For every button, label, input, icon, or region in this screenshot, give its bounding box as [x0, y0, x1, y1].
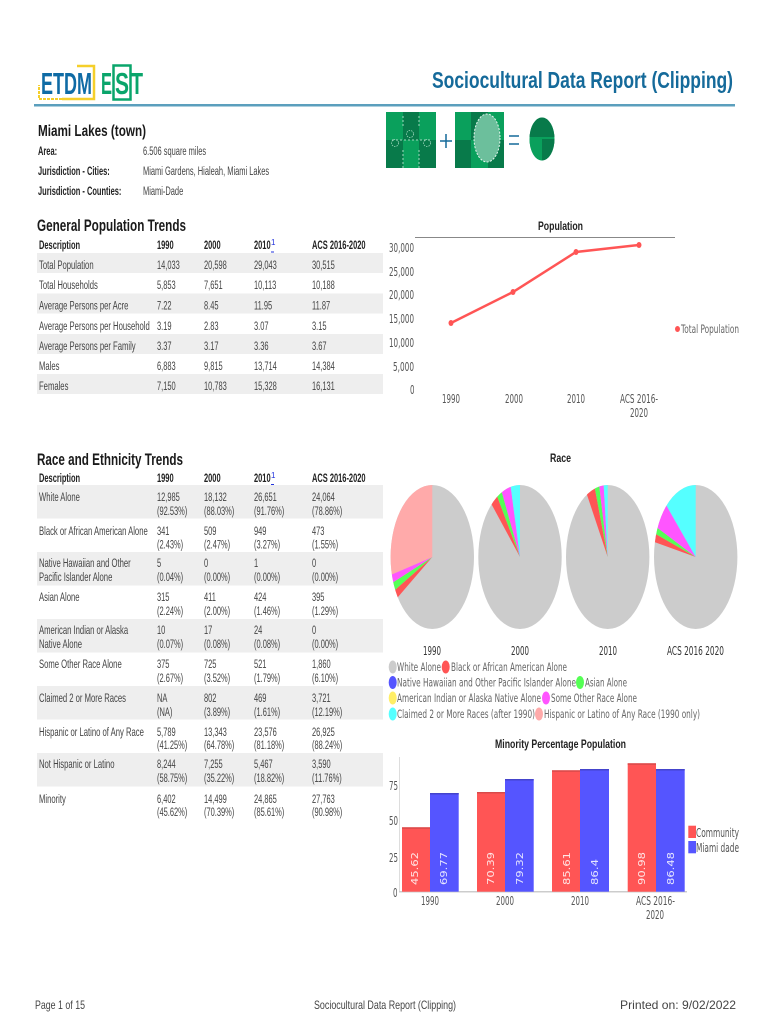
row: Hispanic or Latino of Any Race: (41.25%) — [157, 739, 187, 753]
row: Minority: 24,865 — [254, 793, 277, 807]
row: Not Hispanic or Latino: 7,255 — [204, 758, 223, 772]
row: Some Other Race Alone: 725 — [204, 658, 217, 672]
row: Native Hawaiian and Other Pacific Islander Alone: 0 — [204, 557, 208, 571]
row: Claimed 2 or More Races: 3,721 — [312, 692, 331, 706]
y axis labels: 15,000 — [389, 312, 414, 326]
table header: 1 — [271, 238, 276, 247]
bars: 2010: 85.61 — [562, 852, 573, 885]
row: Asian Alone: 395 — [312, 591, 325, 605]
row: Some Other Race Alone: (2.67%) — [157, 672, 183, 686]
bars: 2010 — [552, 769, 609, 892]
row: White Alone — [37, 485, 383, 519]
community facts: Jurisdiction - Cities: — [38, 165, 110, 179]
table header: 1990 — [157, 239, 174, 253]
row: American Indian or Alaska Native Alone: American Indian or Alaska — [39, 624, 128, 638]
bars: 2010: 86.4 — [590, 859, 601, 885]
community facts: Area: — [38, 145, 57, 159]
chart: minority percentage bar chart — [389, 737, 739, 922]
logo: ETDM EST: ETDM — [41, 66, 92, 101]
legend: race categories — [389, 660, 700, 721]
row: Claimed 2 or More Races — [37, 686, 383, 720]
row: Hispanic or Latino of Any Race: 23,576 — [254, 726, 277, 740]
row: Total Population: 30,515 — [312, 259, 335, 273]
row: Black or African American Alone: 473 — [312, 525, 325, 539]
row: American Indian or Alaska Native Alone: (0.00%) — [312, 638, 338, 652]
logo: ETDM EST: E — [101, 66, 112, 101]
row: Minority — [39, 793, 342, 820]
x axis labels: 2010 — [567, 392, 585, 406]
row: Minority: (90.98%) — [312, 806, 342, 820]
row: Not Hispanic or Latino — [37, 753, 383, 786]
pie: ACS 2016-2020 — [654, 485, 738, 629]
table: general population trends — [37, 238, 383, 394]
row: Minority: Minority — [39, 793, 67, 807]
row: American Indian or Alaska Native Alone: Native Alone — [39, 638, 82, 652]
bars: 1990 — [402, 793, 459, 892]
row: Native Hawaiian and Other Pacific Islander Alone: (0.04%) — [157, 571, 183, 585]
footer — [35, 998, 736, 1012]
row: Asian Alone: 411 — [204, 591, 216, 605]
community facts: Miami Gardens, Hialeah, Miami Lakes — [143, 165, 269, 179]
legend: total population — [675, 322, 739, 336]
y axis labels: 75 — [389, 779, 398, 793]
row: Females: 10,783 — [204, 380, 227, 394]
row: Hispanic or Latino of Any Race: (64.78%) — [204, 739, 234, 753]
y axis labels — [389, 241, 414, 397]
row: Average Persons per Acre: 7.22 — [157, 300, 172, 313]
row: Males: Males — [39, 360, 59, 374]
table header: 1990 — [157, 472, 174, 486]
y axis labels: 0 — [410, 383, 414, 397]
row: Some Other Race Alone: (6.10%) — [312, 672, 338, 686]
row: Claimed 2 or More Races: 802 — [204, 692, 217, 706]
x axis labels: 2020 — [630, 406, 648, 420]
pie year labels — [423, 644, 724, 658]
row: Claimed 2 or More Races: (3.89%) — [204, 706, 230, 720]
row: Average Persons per Acre: 11.87 — [312, 300, 330, 313]
row: Average Persons per Household — [39, 320, 327, 334]
table header: 1 — [271, 471, 276, 480]
row: Black or African American Alone: 949 — [254, 525, 267, 539]
x axis labels: ACS 2016- — [636, 894, 675, 908]
bars: 2000: 79.32 — [515, 852, 526, 885]
footer: Sociocultural Data Report (Clipping) — [314, 998, 456, 1012]
footer: Printed on: 9/02/2022 — [620, 998, 736, 1012]
row: White Alone: White Alone — [39, 491, 80, 505]
pie: 2000 — [478, 485, 562, 629]
row: Native Hawaiian and Other Pacific Islander Alone: 5 — [157, 557, 161, 571]
y axis labels: 25,000 — [389, 265, 414, 279]
row: White Alone: 26,651 — [254, 491, 277, 505]
row: Native Hawaiian and Other Pacific Islander Alone: 0 — [312, 557, 316, 571]
row: Females: 7,150 — [157, 380, 176, 394]
x axis labels: 2000 — [505, 392, 523, 406]
row: White Alone: (92.53%) — [157, 505, 187, 519]
row: Males: 14,384 — [312, 360, 335, 374]
row: Total Population: Total Population — [39, 259, 94, 273]
row: Total Households — [39, 279, 335, 293]
pie year labels: 2010 — [599, 644, 617, 658]
x axis labels — [421, 894, 675, 922]
row: Total Households: 7,651 — [204, 279, 223, 293]
row: White Alone: (91.76%) — [254, 505, 284, 519]
row: Males — [39, 360, 335, 374]
legend: race categories: Native Hawaiian and Other Pacific Islander Alone — [397, 676, 576, 690]
row: Not Hispanic or Latino: (18.82%) — [254, 772, 284, 786]
row: Average Persons per Household: 2.83 — [204, 320, 219, 334]
row: Total Households: 10,188 — [312, 279, 335, 293]
row: Asian Alone: Asian Alone — [39, 591, 80, 605]
row: American Indian or Alaska Native Alone — [37, 619, 383, 652]
row: Claimed 2 or More Races: (NA) — [157, 706, 172, 720]
row: Total Households: 5,853 — [157, 279, 176, 293]
bars: ACS 2016-2020 — [628, 763, 685, 892]
table: race and ethnicity trends — [37, 471, 383, 820]
legend: race categories: Claimed 2 or More Races (after 1990) — [397, 707, 535, 721]
row: Claimed 2 or More Races: 469 — [254, 692, 267, 706]
row: Black or African American Alone: Black or African American Alone — [39, 525, 148, 539]
row: Total Population — [37, 253, 383, 273]
x axis labels: 1990 — [442, 392, 460, 406]
bars: 2000: 70.39 — [486, 852, 497, 885]
chart: population line chart — [389, 219, 739, 420]
row: Not Hispanic or Latino: (11.76%) — [312, 772, 342, 786]
chart title: Minority Percentage Population — [495, 737, 626, 751]
row: Some Other Race Alone: 375 — [157, 658, 170, 672]
bars: 1990: 69.77 — [439, 852, 450, 885]
row: Asian Alone: (1.29%) — [312, 605, 338, 619]
row: Average Persons per Acre: Average Persons per Acre — [39, 300, 129, 313]
row: Native Hawaiian and Other Pacific Islander Alone: Native Hawaiian and Other — [39, 557, 131, 571]
table header: 2010 — [254, 472, 271, 486]
line: total population — [448, 242, 642, 326]
row: Average Persons per Family: Average Persons per Family — [39, 340, 136, 354]
row: Males: 13,714 — [254, 360, 277, 374]
row: Total Households: 10,113 — [254, 279, 277, 293]
row: Minority: (45.62%) — [157, 806, 187, 820]
row: Average Persons per Household: Average Persons per Household — [39, 320, 150, 334]
row: Black or African American Alone: (3.27%) — [254, 539, 280, 552]
y axis labels — [389, 779, 398, 900]
bars: 2000 — [477, 779, 534, 892]
row: Minority: 27,763 — [312, 793, 335, 807]
table header: 2000 — [204, 239, 221, 253]
row: Black or African American Alone: (2.43%) — [157, 539, 183, 552]
row: Some Other Race Alone: (1.79%) — [254, 672, 280, 686]
row: Black or African American Alone: 341 — [157, 525, 170, 539]
y axis labels: 20,000 — [389, 288, 414, 302]
row: Average Persons per Family: 3.37 — [157, 340, 172, 354]
row: Total Population: 20,598 — [204, 259, 227, 273]
legend: race categories: Asian Alone — [585, 676, 627, 690]
icon: clipping puzzle equation — [386, 112, 555, 168]
row: American Indian or Alaska Native Alone: (0.07%) — [157, 638, 183, 652]
row: American Indian or Alaska Native Alone: (0.08%) — [204, 638, 230, 652]
logo: ETDM EST: S — [115, 66, 129, 101]
row: American Indian or Alaska Native Alone: (0.08%) — [254, 638, 280, 652]
row: Minority: (70.39%) — [204, 806, 234, 820]
row: American Indian or Alaska Native Alone: 10 — [157, 624, 166, 638]
row: Hispanic or Latino of Any Race: 5,789 — [157, 726, 176, 740]
table header — [39, 471, 366, 486]
row: Black or African American Alone — [39, 525, 338, 552]
row: Black or African American Alone: 509 — [204, 525, 217, 539]
row: Hispanic or Latino of Any Race: 13,343 — [204, 726, 227, 740]
y axis labels: 5,000 — [393, 360, 414, 374]
row: Average Persons per Household: 3.19 — [157, 320, 172, 334]
row: Females: 15,328 — [254, 380, 277, 394]
bars: ACS 2016-2020: 86.48 — [666, 852, 677, 885]
table header: 2000 — [204, 472, 221, 486]
row: White Alone: 12,985 — [157, 491, 180, 505]
row: Hispanic or Latino of Any Race: (88.24%) — [312, 739, 342, 753]
row: Hispanic or Latino of Any Race: Hispanic or Latino of Any Race — [39, 726, 144, 740]
row: Hispanic or Latino of Any Race: (81.18%) — [254, 739, 284, 753]
row: Average Persons per Household: 3.15 — [312, 320, 327, 334]
row: Some Other Race Alone — [39, 658, 338, 686]
row: Females: Females — [39, 380, 68, 394]
chart title: Population — [538, 219, 583, 233]
bars: 1990: 45.62 — [410, 852, 421, 885]
y axis labels: 30,000 — [389, 241, 414, 255]
row: Native Hawaiian and Other Pacific Islander Alone — [37, 552, 383, 586]
row: Females: 16,131 — [312, 380, 335, 394]
row: Native Hawaiian and Other Pacific Islander Alone: (0.00%) — [312, 571, 338, 585]
x axis labels: 2020 — [646, 908, 664, 922]
legend: race categories: White Alone — [397, 660, 441, 674]
row: Hispanic or Latino of Any Race: 26,925 — [312, 726, 335, 740]
pie: 2010 — [566, 485, 650, 629]
row: Total Households: Total Households — [39, 279, 98, 293]
community facts: 6.506 square miles — [143, 145, 206, 159]
table header: ACS 2016-2020 — [312, 239, 366, 253]
row: Total Population: 29,043 — [254, 259, 277, 273]
row: Asian Alone: (2.24%) — [157, 605, 183, 619]
table header: Description — [39, 239, 80, 253]
row: Not Hispanic or Latino: 5,467 — [254, 758, 273, 772]
x axis labels — [442, 392, 658, 420]
row: Average Persons per Family — [37, 334, 383, 354]
row: Average Persons per Family: 3.17 — [204, 340, 219, 354]
row: Average Persons per Acre: 8.45 — [204, 300, 219, 313]
x axis labels: 2010 — [571, 894, 589, 908]
x axis labels: ACS 2016- — [620, 392, 658, 406]
row: Not Hispanic or Latino: 3,590 — [312, 758, 331, 772]
row: Females — [37, 374, 383, 394]
row: American Indian or Alaska Native Alone: 24 — [254, 624, 263, 638]
y axis labels: 25 — [389, 851, 398, 865]
row: Asian Alone: (1.46%) — [254, 605, 280, 619]
y axis labels: 50 — [389, 814, 398, 828]
row: Average Persons per Family: 3.67 — [312, 340, 327, 354]
pie year labels: 1990 — [423, 644, 441, 658]
x axis labels: 2000 — [496, 894, 514, 908]
legend: community and Miami-Dade — [688, 826, 739, 855]
pie: 1990 — [390, 485, 474, 629]
row: Asian Alone: 424 — [254, 591, 267, 605]
row: White Alone: (88.03%) — [204, 505, 234, 519]
row: Native Hawaiian and Other Pacific Islander Alone: Pacific Islander Alone — [39, 571, 113, 585]
row: Minority: (85.61%) — [254, 806, 284, 820]
row: White Alone: (78.86%) — [312, 505, 342, 519]
legend: community and Miami-Dade: Miami dade — [696, 841, 739, 855]
community facts: Miami-Dade — [143, 185, 184, 199]
bars: ACS 2016-2020: 90.98 — [637, 852, 648, 885]
legend: race categories: American Indian or Alaska Native Alone — [397, 691, 541, 705]
row: Claimed 2 or More Races: (12.19%) — [312, 706, 342, 720]
row: Total Population: 14,033 — [157, 259, 180, 273]
row: Native Hawaiian and Other Pacific Islander Alone: (0.00%) — [204, 571, 230, 585]
row: Males: 9,815 — [204, 360, 223, 374]
row: Asian Alone: (2.00%) — [204, 605, 230, 619]
row: Average Persons per Acre — [37, 294, 383, 314]
logo: ETDM EST: T — [131, 66, 143, 101]
row: Not Hispanic or Latino: (58.75%) — [157, 772, 187, 786]
heading: General Population Trends: General Population Trends — [37, 217, 186, 235]
legend: total population: Total Population — [680, 322, 739, 336]
row: Some Other Race Alone: (3.52%) — [204, 672, 230, 686]
row: White Alone: 24,064 — [312, 491, 335, 505]
row: American Indian or Alaska Native Alone: 17 — [204, 624, 213, 638]
legend: community and Miami-Dade: Community — [696, 826, 739, 840]
row: Some Other Race Alone: 521 — [254, 658, 267, 672]
row: Some Other Race Alone: Some Other Race Alone — [39, 658, 122, 672]
y axis labels: 0 — [393, 886, 398, 900]
row: Not Hispanic or Latino: Not Hispanic or Latino — [39, 758, 115, 772]
row: Minority: 14,499 — [204, 793, 227, 807]
community name: Miami Lakes (town) — [38, 123, 146, 140]
community facts: Jurisdiction - Counties: — [38, 185, 121, 199]
chart: race pie charts — [388, 454, 738, 720]
legend: race categories: Black or African American Alone — [451, 660, 567, 674]
community facts — [38, 145, 269, 199]
row: Asian Alone: 315 — [157, 591, 170, 605]
table header — [39, 238, 366, 253]
table header: 2010 — [254, 239, 271, 253]
footer: Page 1 of 15 — [35, 998, 85, 1012]
row: Average Persons per Household: 3.07 — [254, 320, 269, 334]
row: Not Hispanic or Latino: 8,244 — [157, 758, 176, 772]
heading: Race and Ethnicity Trends: Race and Ethnicity Trends — [37, 451, 183, 469]
legend: race categories: Some Other Race Alone — [551, 691, 637, 705]
row: Claimed 2 or More Races: (1.61%) — [254, 706, 280, 720]
table header: Description — [39, 472, 80, 486]
row: Claimed 2 or More Races: NA — [157, 692, 168, 706]
row: Asian Alone — [39, 591, 338, 619]
row: Average Persons per Acre: 11.95 — [254, 300, 272, 313]
row: Not Hispanic or Latino: (35.22%) — [204, 772, 234, 786]
table header: ACS 2016-2020 — [312, 472, 366, 486]
x axis labels: 1990 — [421, 894, 439, 908]
row: Claimed 2 or More Races: Claimed 2 or More Races — [39, 692, 126, 706]
row: American Indian or Alaska Native Alone: 0 — [312, 624, 316, 638]
row: Hispanic or Latino of Any Race — [39, 726, 342, 753]
row: Average Persons per Family: 3.36 — [254, 340, 269, 354]
pie year labels: 2000 — [511, 644, 529, 658]
row: Black or African American Alone: (1.55%) — [312, 539, 338, 552]
pie year labels: ACS 2016 2020 — [667, 644, 724, 658]
chart title: Race — [550, 451, 571, 465]
y axis labels: 10,000 — [389, 336, 414, 350]
row: White Alone: 18,132 — [204, 491, 227, 505]
row: Some Other Race Alone: 1,860 — [312, 658, 331, 672]
row: Native Hawaiian and Other Pacific Islander Alone: (0.00%) — [254, 571, 280, 585]
row: Black or African American Alone: (2.47%) — [204, 539, 230, 552]
row: Minority: 6,402 — [157, 793, 176, 807]
row: Males: 6,883 — [157, 360, 176, 374]
row: Native Hawaiian and Other Pacific Islander Alone: 1 — [254, 557, 258, 571]
